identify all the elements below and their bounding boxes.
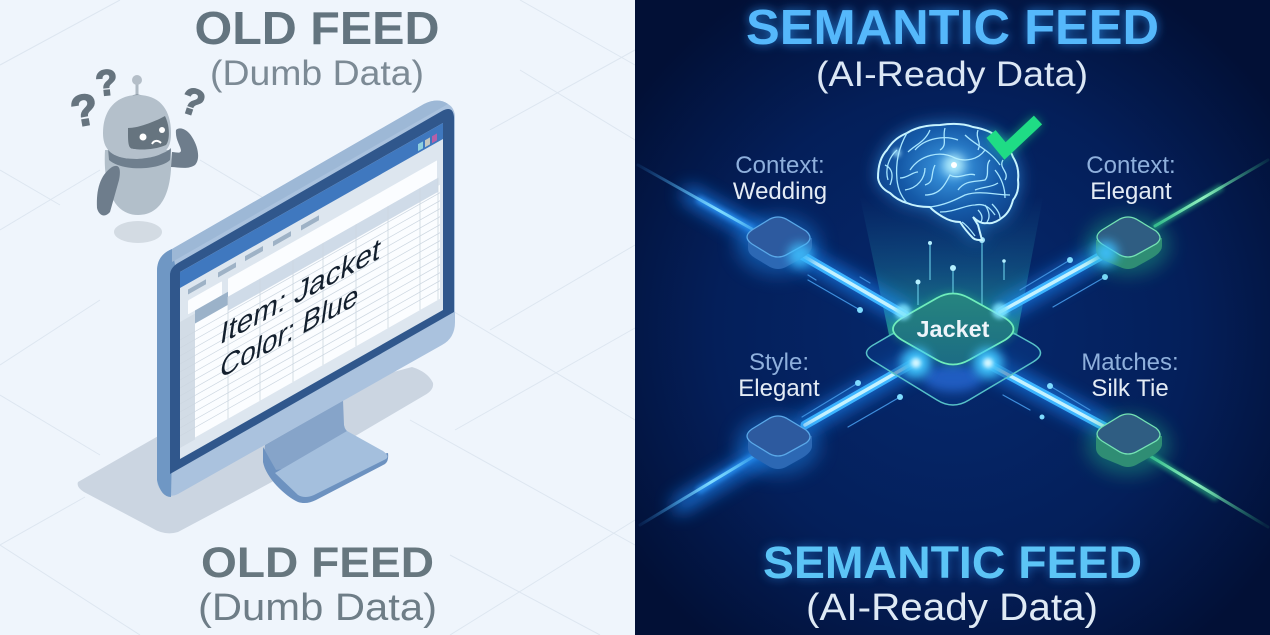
node: context wedding xyxy=(736,215,820,275)
robot antenna xyxy=(129,75,145,104)
heading: semantic feed bottom: SEMANTIC FEED xyxy=(763,537,1142,588)
light cone xyxy=(860,197,1043,335)
heading: semantic feed bottom xyxy=(763,537,1142,629)
labels: matches silk tie: Silk Tie xyxy=(1091,375,1169,402)
labels: context elegant: Context: xyxy=(1086,152,1176,179)
robot visor xyxy=(128,116,169,150)
intersection flares xyxy=(895,303,1008,378)
heading: semantic feed top: (AI-Ready Data) xyxy=(816,55,1088,94)
ribbon xyxy=(188,214,319,294)
node: matches silk tie xyxy=(1086,414,1170,475)
labels: context wedding xyxy=(733,152,827,205)
heading: old feed bottom xyxy=(198,539,437,629)
icon: green check mark xyxy=(991,120,1038,151)
heading: old feed bottom: OLD FEED xyxy=(201,539,434,587)
monitor stand xyxy=(263,400,388,503)
labels: context wedding: Wedding xyxy=(733,178,827,205)
heading: semantic feed top: SEMANTIC FEED xyxy=(746,1,1159,55)
icon: confused robot xyxy=(67,61,210,243)
robot body xyxy=(105,150,171,215)
window buttons xyxy=(418,133,437,151)
jacket node xyxy=(893,294,1014,364)
panel: old feed xyxy=(0,0,635,635)
jacket platform outline xyxy=(866,304,1040,405)
trace dots xyxy=(855,257,1108,420)
labels: style elegant xyxy=(738,349,820,402)
robot head xyxy=(103,95,171,159)
platform under-glow xyxy=(923,364,983,392)
heading: old feed bottom: (Dumb Data) xyxy=(198,587,437,629)
labels: context wedding: Context: xyxy=(735,152,825,179)
monitor screen xyxy=(180,123,443,459)
heading: semantic feed top: SEMANTIC FEED xyxy=(746,1,1159,55)
screen text: item and color: Item: Jacket xyxy=(218,231,383,352)
robot arms xyxy=(97,128,198,215)
labels: matches silk tie xyxy=(1081,349,1179,402)
labels: style elegant: Style: xyxy=(749,349,809,376)
spreadsheet table xyxy=(180,172,440,448)
question marks: ? xyxy=(94,61,120,104)
small traces xyxy=(802,260,1105,427)
beam glow xyxy=(680,195,1110,505)
data streams to brain xyxy=(916,237,1006,312)
node: context elegant xyxy=(1086,215,1170,275)
question marks: ? xyxy=(67,84,102,137)
question marks: ? xyxy=(176,79,210,125)
monitor floor shadow xyxy=(78,367,433,533)
icon: desktop monitor xyxy=(157,100,455,503)
monitor casing xyxy=(157,100,455,496)
heading: semantic feed bottom: SEMANTIC FEED xyxy=(763,537,1142,588)
panel: semantic feed xyxy=(635,0,1270,635)
screen text: item and color: Color: Blue xyxy=(218,277,361,386)
heading: old feed top: OLD FEED xyxy=(194,2,440,54)
heading: semantic feed bottom: (AI-Ready Data) xyxy=(806,587,1098,629)
labels: matches silk tie: Matches: xyxy=(1081,349,1179,376)
outer beams xyxy=(700,200,756,490)
heading: old feed top xyxy=(194,2,440,93)
jacket node: Jacket xyxy=(916,316,990,342)
brain folds xyxy=(885,128,1010,236)
beams xyxy=(638,160,1268,527)
labels: context elegant xyxy=(1086,152,1176,205)
inner beams xyxy=(798,253,905,315)
icon: brain xyxy=(878,124,1018,240)
heading: semantic feed top xyxy=(746,1,1159,94)
heading: old feed top: (Dumb Data) xyxy=(210,54,424,93)
node: style elegant xyxy=(736,415,820,475)
monitor bezel xyxy=(170,109,454,474)
labels: style elegant: Elegant xyxy=(738,375,820,402)
labels: context elegant: Elegant xyxy=(1090,178,1172,205)
question marks xyxy=(67,61,210,137)
